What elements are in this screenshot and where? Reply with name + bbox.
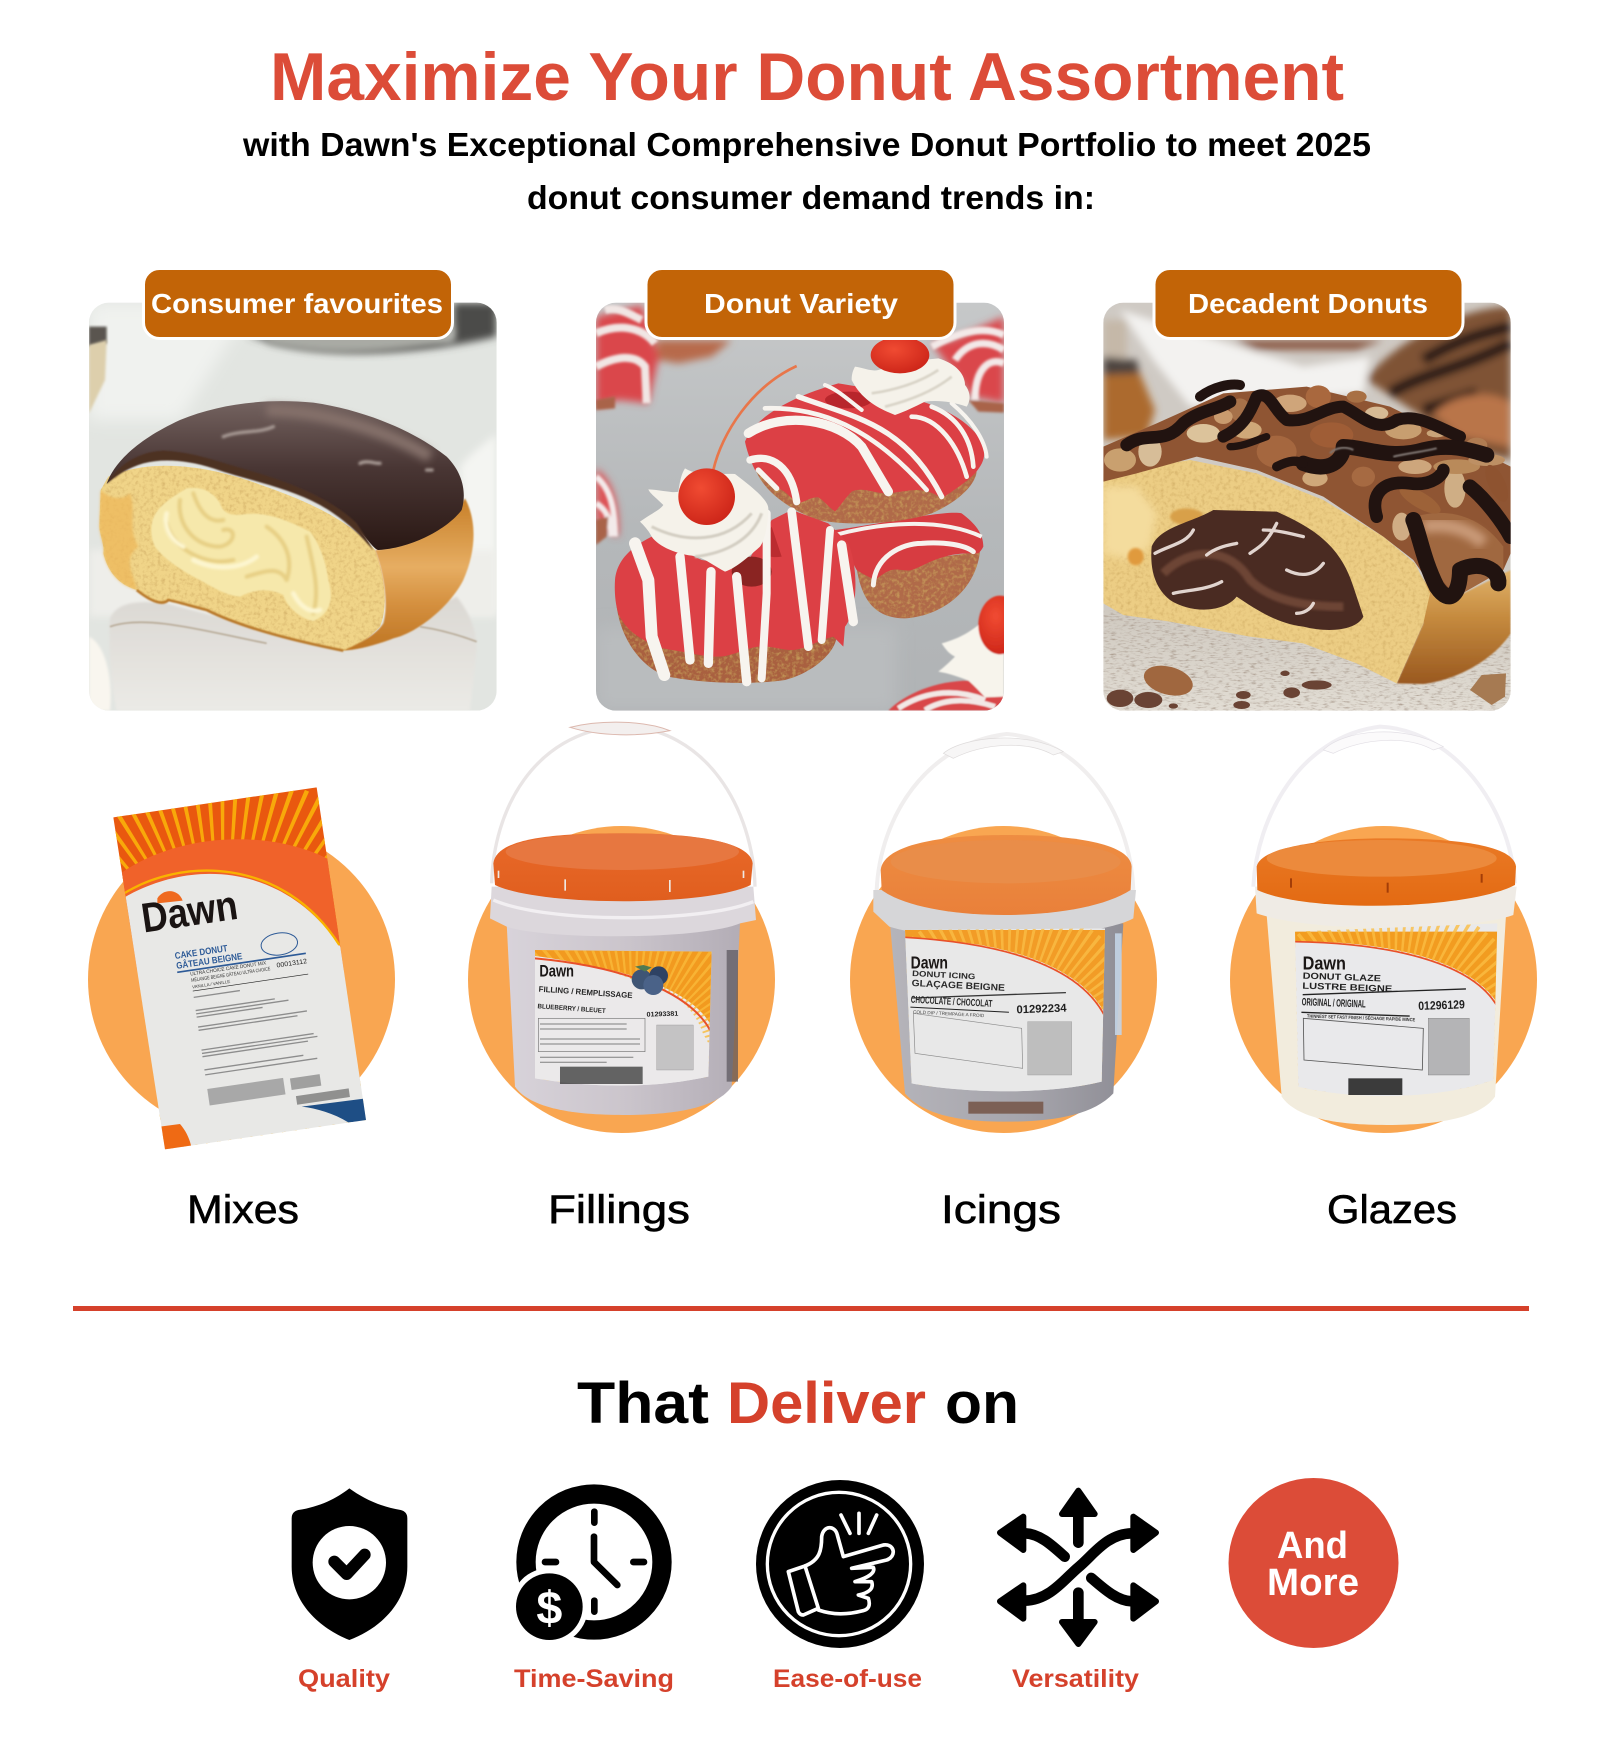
subtitle: with Dawn's Exceptional Comprehensive Donut Portfolio to meet 2025 xyxy=(242,126,1371,163)
cherry stem xyxy=(713,366,797,470)
crust xyxy=(1397,563,1511,684)
badge: and more xyxy=(1228,1478,1398,1648)
icon: mix bag: MÉLANGE BEIGNE GÂTEAU ULTRA CHOICE xyxy=(191,965,271,984)
icon: icing bucket: COLD DIP / TREMPAGE A FROID xyxy=(913,1009,985,1018)
icon: icing bucket: DONUT ICING xyxy=(912,969,976,981)
label: ease-of-use: Ease-of-use xyxy=(773,1665,922,1693)
label: decadent donuts: Decadent Donuts xyxy=(1188,288,1428,319)
panel: consumer favourites photo xyxy=(89,268,497,711)
title: Maximize Your Donut Assortment xyxy=(270,39,1344,115)
panel: decadent donuts photo xyxy=(1103,268,1513,711)
bottom right donut xyxy=(888,594,1004,711)
icon: clock and coin time-saving xyxy=(511,1494,662,1645)
label: mixes: Mixes xyxy=(187,1188,299,1232)
product: glazes xyxy=(1230,727,1537,1163)
subtitle xyxy=(242,126,1371,216)
label: donut variety: Donut Variety xyxy=(704,288,898,319)
pecans xyxy=(1104,385,1513,541)
heading: that deliver on: Deliver xyxy=(727,1371,926,1436)
heading: that deliver on: That xyxy=(577,1371,709,1436)
icon: glaze bucket: DONUT GLAZE xyxy=(1303,971,1381,983)
subtitle: donut consumer demand trends in: xyxy=(527,179,1095,216)
icon: filling bucket: BLUEBERRY / BLEUET xyxy=(537,1003,606,1015)
caramel glaze xyxy=(1103,387,1511,603)
product: icings xyxy=(850,734,1157,1167)
icon: mix bag xyxy=(113,787,366,1150)
label: donut variety xyxy=(646,268,955,338)
icon: glaze bucket: LUSTRE BEIGNE xyxy=(1302,981,1392,994)
icon: filling bucket xyxy=(490,722,756,1115)
label: fillings: Fillings xyxy=(548,1188,690,1232)
logo: Dawn xyxy=(157,891,183,903)
label: quality: Quality xyxy=(298,1665,390,1693)
label: consumer favourites xyxy=(144,268,452,338)
icon: glaze bucket xyxy=(1253,727,1517,1163)
product: mixes xyxy=(88,787,395,1150)
badge: and more: More xyxy=(1267,1562,1359,1604)
custard filling xyxy=(151,488,331,621)
label: time-saving: Time-Saving xyxy=(514,1665,674,1693)
bread xyxy=(1103,460,1430,683)
icon: mix bag: VANILLA / VANILLE xyxy=(192,979,231,989)
icon: icing bucket: Dawn xyxy=(911,953,948,973)
top donut xyxy=(745,337,987,523)
heading: that deliver on: on xyxy=(945,1371,1019,1436)
middle donut xyxy=(835,513,983,618)
icon: mix bag: 00013112 xyxy=(276,958,308,970)
chocolate drizzle xyxy=(1127,385,1511,596)
background donuts xyxy=(596,305,1004,537)
label: versatility: Versatility xyxy=(1012,1665,1139,1693)
icon: clock and coin time-saving: $ xyxy=(536,1581,562,1633)
icon: blueberries xyxy=(632,965,668,995)
icon: filling bucket: 01293381 xyxy=(646,1011,679,1019)
icon: glaze bucket: 01296129 xyxy=(1418,997,1465,1013)
chocolate glaze xyxy=(107,401,464,550)
product: fillings xyxy=(468,722,775,1177)
icon: mix bag: CAKE DONUT xyxy=(174,943,229,961)
chocolate filling xyxy=(1151,510,1363,630)
label: decadent donuts xyxy=(1154,268,1463,338)
icon: icing bucket xyxy=(873,734,1136,1167)
label: consumer favourites: Consumer favourites xyxy=(151,288,443,319)
icon: mix bag: Dawn xyxy=(138,881,241,942)
icon: glaze bucket: ORIGINAL / ORIGINAL xyxy=(1302,996,1366,1011)
panel: donut variety photo xyxy=(596,268,1022,711)
icon: icing bucket: GLAÇAGE BEIGNE xyxy=(911,978,1005,993)
bottom donut xyxy=(615,468,855,683)
icon: pointing hand ease-of-use xyxy=(756,1480,924,1648)
label: icings: Icings xyxy=(941,1188,1061,1232)
icon: filling bucket: Dawn xyxy=(539,962,574,981)
icon: icing bucket: CHOCOLATE / CHOCOLAT xyxy=(910,995,993,1010)
icon: filling bucket: FILLING / REMPLISSAGE xyxy=(538,985,633,1000)
icon: icing bucket: 01292234 xyxy=(1016,1003,1067,1016)
icon: glaze bucket: Dawn xyxy=(1303,952,1346,973)
label: glazes: Glazes xyxy=(1327,1188,1457,1232)
bread face xyxy=(99,466,385,651)
crust xyxy=(343,498,474,651)
fallen pecans and crumbs xyxy=(1107,661,1506,709)
badge: and more: And xyxy=(1277,1525,1348,1567)
icon: glaze bucket: THINNEST SET FAST FINISH / SÉCHAGE RAPIDE MINCE xyxy=(1307,1012,1415,1022)
icon: shield quality xyxy=(292,1488,407,1640)
icon: mix bag: GÂTEAU BEIGNE xyxy=(175,950,243,971)
icon: arrows versatility xyxy=(1000,1491,1156,1644)
icon: mix bag: ULTRA CHOICE CAKE DONUT MIX xyxy=(190,960,267,978)
wood table xyxy=(1103,610,1511,711)
